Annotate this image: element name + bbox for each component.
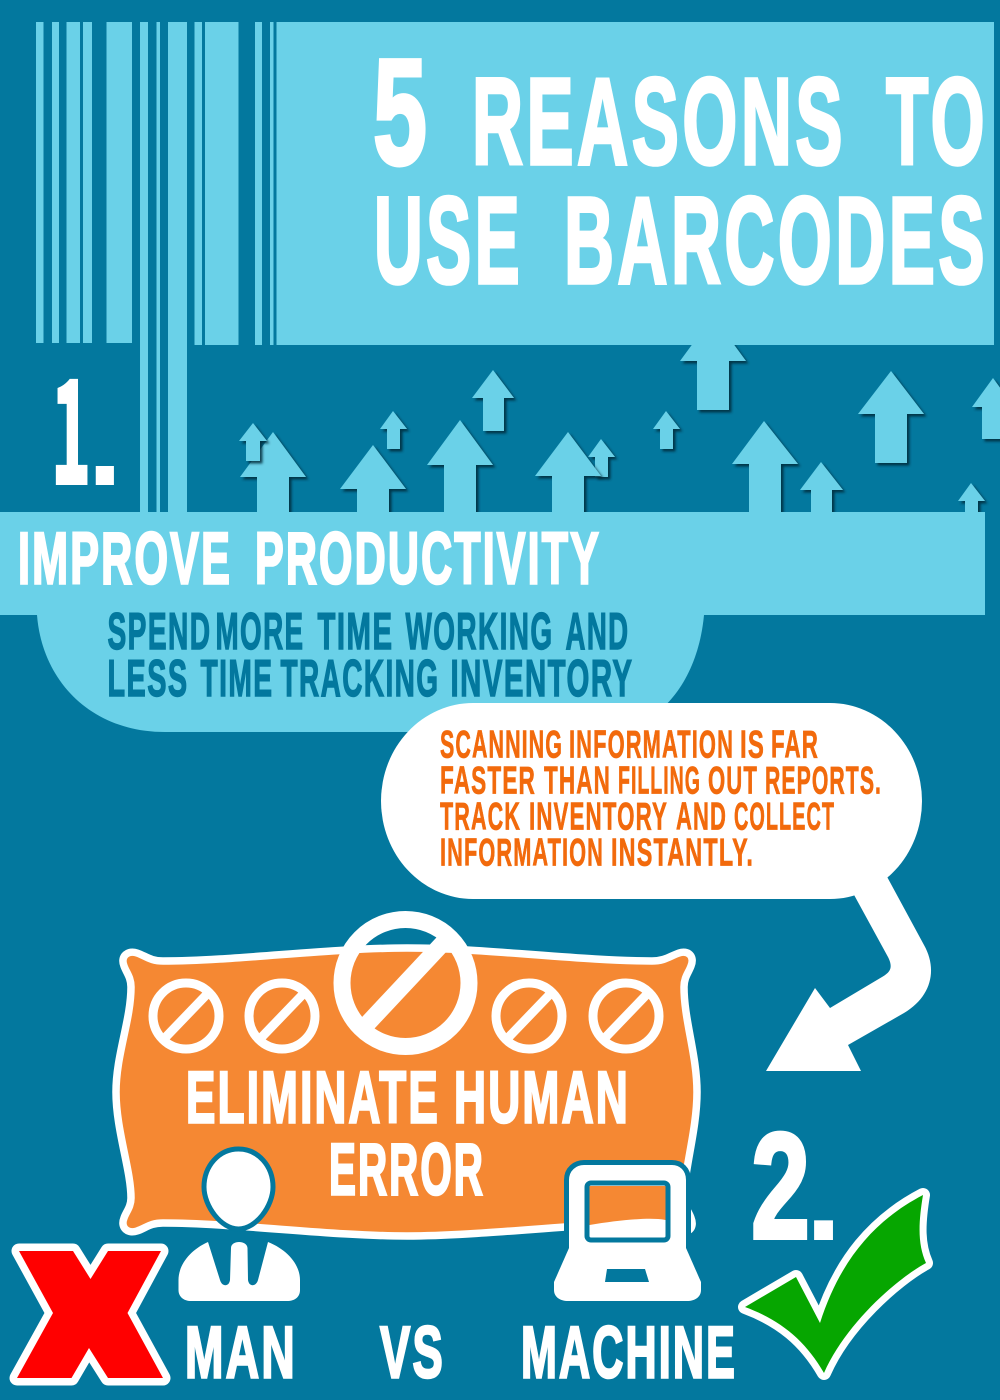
icon: machine bbox=[554, 1162, 701, 1301]
terminal outline bbox=[566, 1162, 688, 1256]
description text: TRACKING bbox=[280, 650, 440, 708]
title bbox=[373, 27, 988, 310]
pillow heading: ERROR bbox=[329, 1130, 485, 1210]
rounded description panel bbox=[37, 615, 704, 732]
bubble text: FAR bbox=[771, 724, 819, 766]
icon: red X bbox=[17, 1251, 163, 1378]
barcode header banner bbox=[36, 22, 994, 512]
man vs machine labels: MAN bbox=[185, 1312, 297, 1394]
description text: MORE bbox=[216, 603, 304, 661]
man vs machine labels: VS bbox=[380, 1312, 445, 1394]
heading: PRODUCTIVITY bbox=[255, 518, 601, 600]
number 1: 1 bbox=[51, 318, 91, 526]
description text: LESS bbox=[108, 650, 188, 708]
title: USE bbox=[374, 172, 523, 310]
pillow heading: ELIMINATE bbox=[186, 1058, 440, 1138]
bubble text: AND bbox=[676, 796, 727, 838]
bubble text: FILLING bbox=[618, 760, 701, 802]
bubble text: INSTANTLY. bbox=[611, 832, 754, 874]
base bbox=[554, 1248, 701, 1301]
band bbox=[0, 512, 985, 615]
bubble text: IS bbox=[740, 724, 765, 766]
bubble text: REPORTS. bbox=[765, 760, 882, 802]
description text: INVENTORY bbox=[450, 650, 634, 708]
bent arrow bbox=[766, 873, 931, 1071]
bubble text: TRACK bbox=[440, 796, 521, 838]
arrows rising between banner and band bbox=[239, 316, 1000, 512]
bubble text: INVENTORY bbox=[529, 796, 668, 838]
screen bbox=[587, 1183, 668, 1240]
panel: eliminate human error pillow bbox=[116, 920, 697, 1236]
number 2: 2 bbox=[751, 1101, 810, 1270]
pillow heading bbox=[186, 1058, 630, 1210]
heading: IMPROVE bbox=[18, 518, 232, 600]
trackpad bbox=[605, 1269, 649, 1282]
screen orange bbox=[590, 1186, 666, 1225]
body bbox=[178, 1242, 300, 1301]
number 2: . bbox=[809, 1144, 838, 1261]
bubble text: FASTER bbox=[440, 760, 536, 802]
number 1: . bbox=[91, 393, 119, 505]
description text: SPEND bbox=[108, 603, 212, 661]
icon: green check bbox=[745, 1195, 926, 1373]
bubble text: INFORMATION bbox=[569, 724, 734, 766]
pillow shape bbox=[116, 948, 697, 1236]
description text: TIME bbox=[200, 650, 274, 708]
head bbox=[204, 1149, 273, 1229]
heading bbox=[18, 518, 601, 600]
bubble text: COLLECT bbox=[734, 796, 835, 838]
description text bbox=[108, 603, 634, 708]
bubble text: OUT bbox=[708, 760, 758, 802]
prohibition icons bbox=[153, 920, 659, 1049]
bubble bbox=[381, 703, 922, 899]
description text: AND bbox=[566, 603, 630, 661]
description text: TIME bbox=[318, 603, 394, 661]
man vs machine labels bbox=[185, 1312, 737, 1394]
bubble text: INFORMATION bbox=[440, 832, 604, 874]
bubble text bbox=[440, 724, 882, 874]
panel: improve productivity bbox=[0, 512, 985, 732]
description text: WORKING bbox=[406, 603, 554, 661]
title: 5 bbox=[373, 27, 427, 196]
icon: man bbox=[178, 1149, 300, 1301]
pillow heading: HUMAN bbox=[454, 1058, 630, 1138]
man vs machine labels: MACHINE bbox=[521, 1312, 737, 1394]
bubble text: THAN bbox=[544, 760, 611, 802]
callout bubble with arrow bbox=[381, 703, 931, 1071]
bubble text: SCANNING bbox=[440, 724, 563, 766]
